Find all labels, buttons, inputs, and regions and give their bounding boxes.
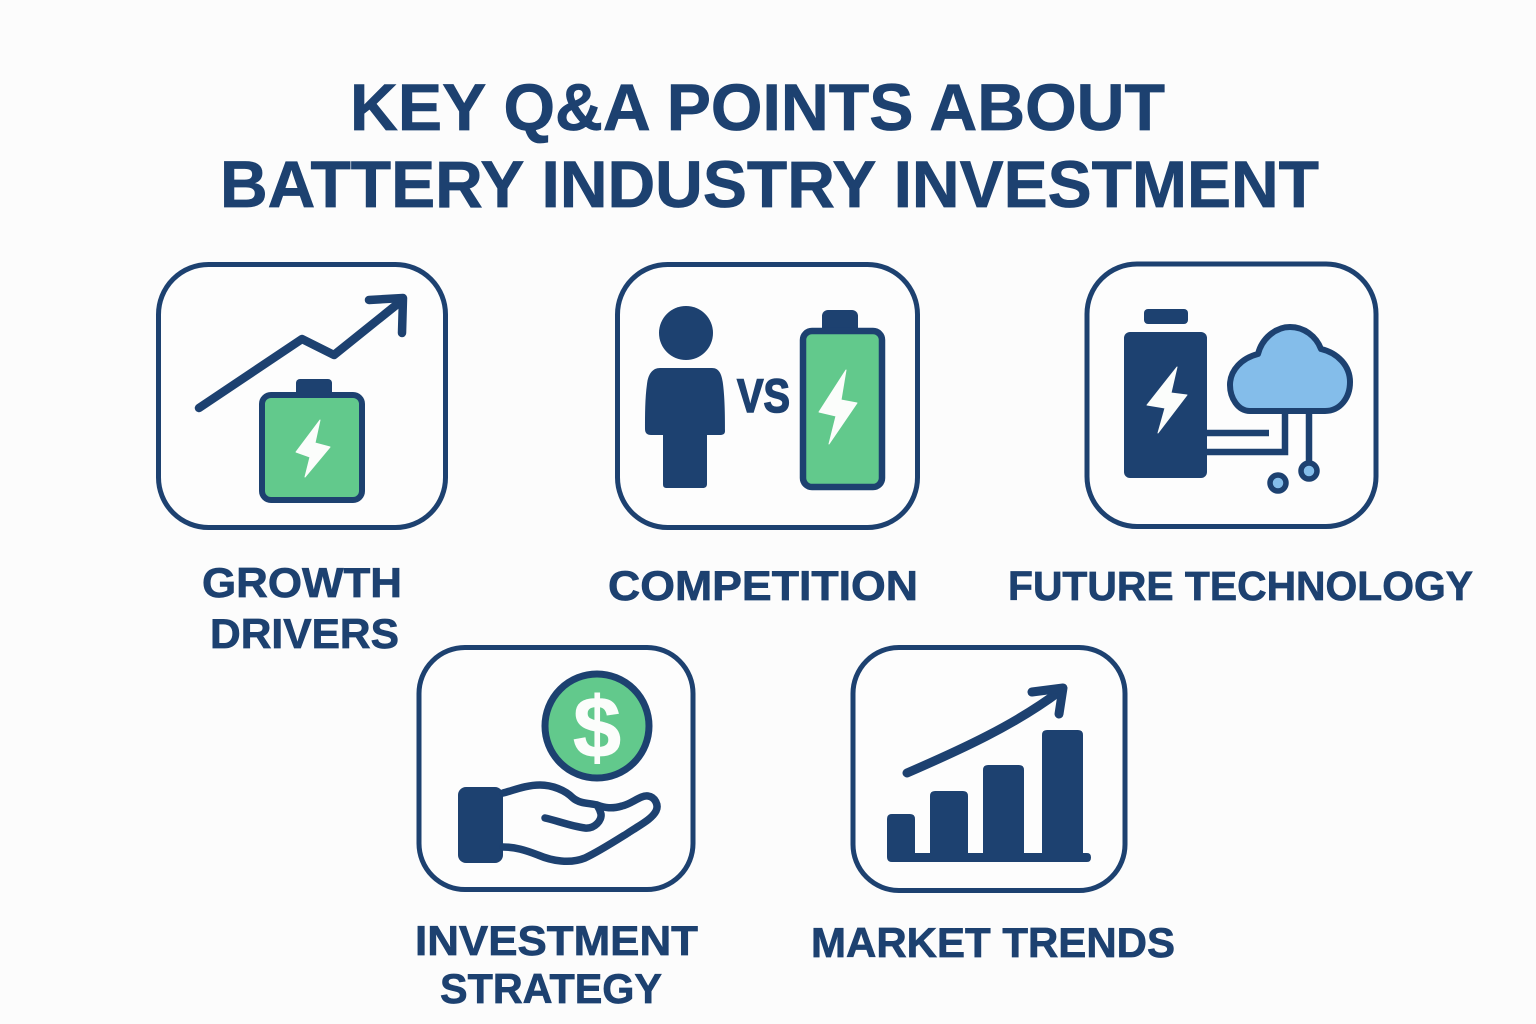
icon: dark battery bbox=[1124, 309, 1207, 478]
icon: circuit lines bbox=[1207, 411, 1309, 462]
icon: dollar coin: $ bbox=[573, 680, 621, 776]
label: market trends: MARKET TRENDS bbox=[811, 919, 1175, 966]
label: future technology: FUTURE TECHNOLOGY bbox=[1008, 563, 1473, 609]
label: investment strategy bbox=[415, 917, 698, 1012]
panel: market trends bbox=[853, 648, 1125, 890]
label: investment strategy: INVESTMENT bbox=[415, 917, 698, 964]
title: KEY Q&A POINTS ABOUT bbox=[350, 70, 1165, 144]
label: investment strategy: STRATEGY bbox=[440, 965, 662, 1012]
icon: circuit nodes bbox=[1270, 463, 1317, 491]
panel: investment strategy bbox=[419, 648, 693, 890]
icon: rising arrow bbox=[199, 298, 403, 408]
title bbox=[220, 70, 1319, 221]
icon: dollar coin bbox=[545, 674, 649, 778]
icon: rising curved arrow bbox=[907, 688, 1063, 773]
icon: open hand bbox=[458, 785, 657, 863]
label: growth drivers bbox=[202, 559, 402, 657]
panel: competition bbox=[618, 264, 918, 528]
icon frame: growth drivers bbox=[158, 264, 446, 528]
label: growth drivers: DRIVERS bbox=[210, 610, 399, 657]
label: growth drivers: GROWTH bbox=[202, 559, 402, 606]
icon: cloud bbox=[1230, 327, 1350, 411]
icon: tall green battery bbox=[803, 310, 882, 487]
panel: growth drivers bbox=[158, 264, 446, 528]
icon frame: market trends bbox=[853, 648, 1125, 890]
icon frame: investment strategy bbox=[419, 648, 693, 890]
title: BATTERY INDUSTRY INVESTMENT bbox=[220, 147, 1319, 221]
icon frame: competition bbox=[618, 264, 918, 528]
icon: person bbox=[645, 306, 725, 488]
label: competition: COMPETITION bbox=[608, 562, 918, 609]
icon: green battery bbox=[262, 379, 362, 500]
text: VS: VS bbox=[737, 369, 790, 422]
panel: future technology bbox=[1087, 264, 1376, 526]
icon frame: future technology bbox=[1087, 264, 1376, 526]
bar chart bbox=[887, 730, 1091, 862]
